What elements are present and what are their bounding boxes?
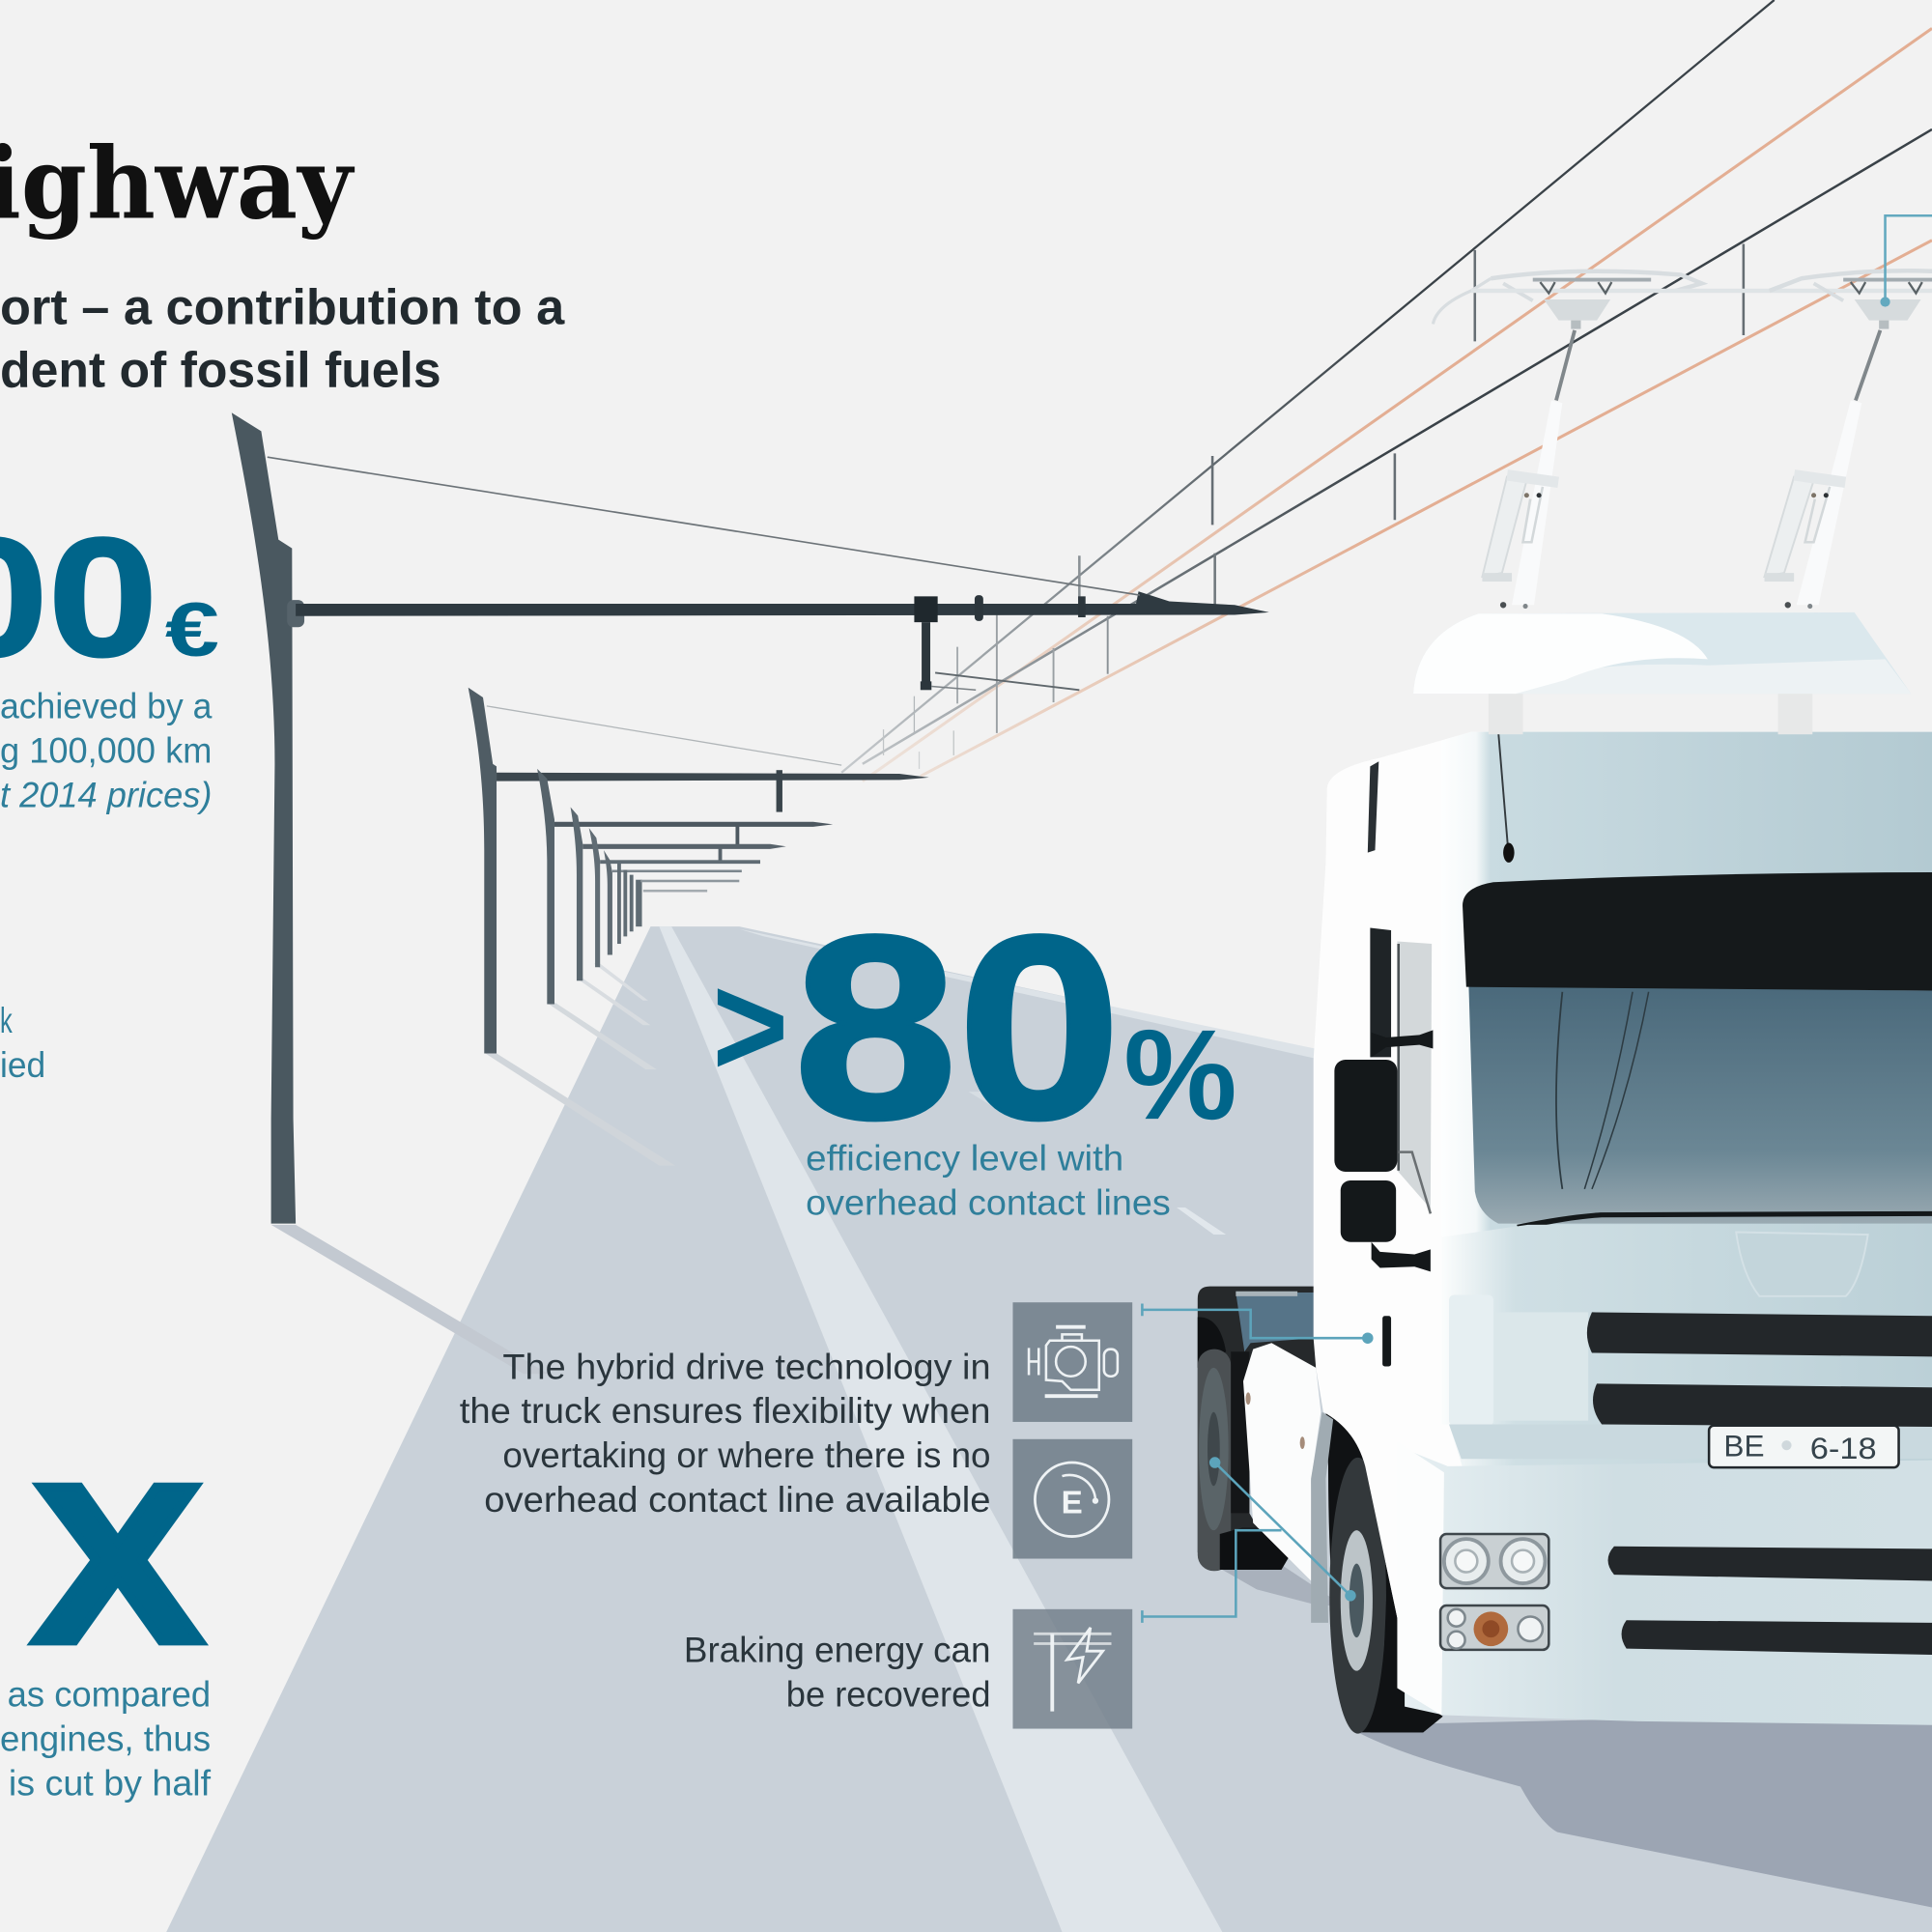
road surface [166,926,1932,1932]
catenary pole 2 [469,688,929,1054]
roof deflector [1413,612,1911,734]
text: braking energy: be recovered [786,1675,991,1715]
stat: efficiency: overhead contact lines [806,1183,1171,1223]
text: braking energy [684,1631,991,1715]
text: hybrid drive: the truck ensures flexibility when [460,1391,991,1431]
stat: 2x: engines, thus [0,1719,211,1758]
door window [1370,927,1391,1057]
grilles [1587,1312,1932,1356]
text: hybrid drive: The hybrid drive technology in [502,1347,991,1386]
pantograph left [1433,271,1932,609]
road centre line [659,926,1222,1932]
callout: pantograph [1880,215,1932,307]
stat: efficiency: 80 [793,882,1122,1174]
distant catenary poles [589,828,760,967]
icon: power line and lightning [1012,1609,1132,1729]
stat: euro savings [0,504,219,814]
licence plate [1709,1426,1899,1467]
headlights [1440,1534,1548,1588]
catenary pole 1 [232,412,1269,1224]
wiper [1517,1211,1932,1231]
stat: efficiency: % [1123,1004,1237,1147]
stat: 2x: is cut by half [9,1763,212,1803]
cab front lower panel [1441,1224,1932,1466]
truck shadow [1213,1565,1932,1907]
truck body side [1243,1343,1321,1583]
stat: euro savings: g 100,000 km [0,731,212,771]
text fragment: left edge [0,1001,45,1085]
text: braking energy: Braking energy can [684,1631,991,1670]
callout: braking [1142,1457,1356,1623]
subtitle [0,279,565,399]
catenary pole 4 [571,807,786,980]
stat: euro savings: t 2014 prices) [0,775,212,814]
overhead contact wires [841,0,1932,781]
text fragment: left edge: k [0,1001,13,1040]
text: hybrid drive: overtaking or where there is no [502,1435,991,1475]
truck bumper: 6-18 [1810,1431,1877,1465]
callout: engine [1142,1303,1374,1344]
subtitle: ort – a contribution to a [0,279,565,335]
text: hybrid drive [460,1347,991,1520]
icon: energy recovery [1012,1439,1132,1559]
door handle [1382,1316,1391,1367]
text fragment: left edge: ied [0,1045,45,1085]
truck rear wheel and chassis [1198,1287,1316,1571]
truck cab [1314,732,1932,1618]
catenary pole 3 [537,769,833,1005]
truck front wheel [1311,1412,1443,1734]
text: hybrid drive: overhead contact line available [484,1480,991,1520]
subtitle: dent of fossil fuels [0,343,441,399]
windscreen [1468,985,1932,1224]
stat: efficiency [712,882,1237,1223]
pantograph right [1765,270,1932,609]
stat: euro savings: € [165,586,219,672]
truck bumper [1397,1312,1932,1725]
stat: euro savings: achieved by a [0,687,213,726]
sun visor [1463,872,1932,991]
icon: energy recovery: E [1062,1485,1083,1520]
antenna [1493,671,1515,863]
truck bumper: BE [1723,1429,1765,1463]
stat: 2x [0,1439,212,1803]
icon: engine [1012,1302,1132,1422]
mirrors [1372,1030,1433,1057]
stat: efficiency: > [712,945,788,1107]
stat: efficiency: efficiency level with [806,1139,1123,1179]
pole shadows [271,963,675,1374]
stat: 2x: X [33,1439,202,1690]
stat: 2x: as compared [8,1675,211,1715]
